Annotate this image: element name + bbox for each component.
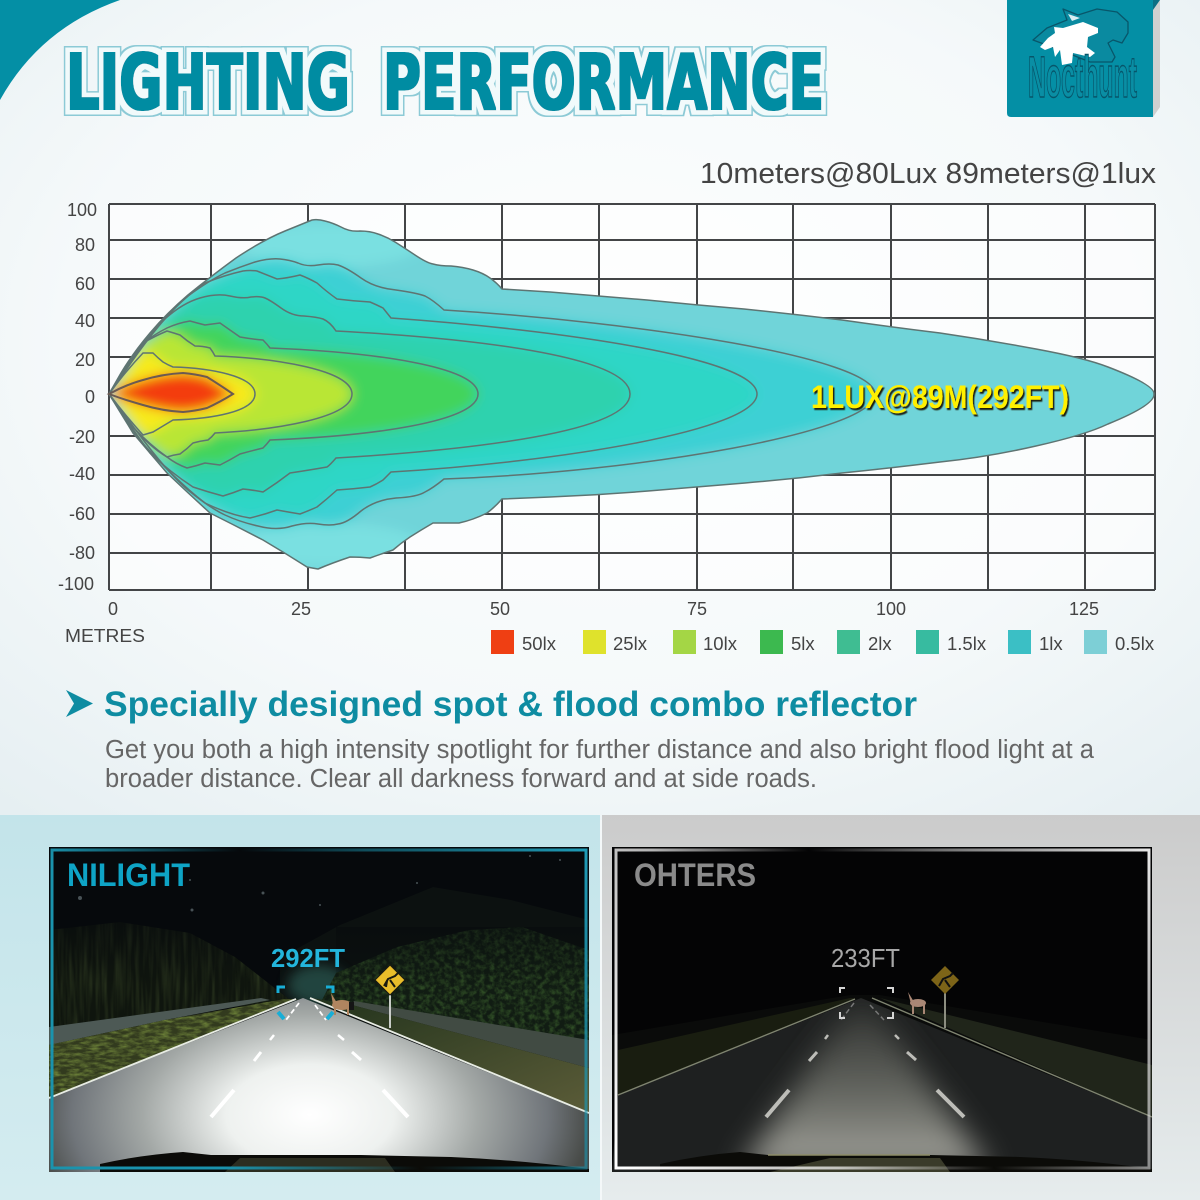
chart: beam pattern isolux diagram — [58, 200, 1170, 646]
focus brackets — [278, 987, 333, 993]
hood of vehicle — [100, 1152, 589, 1172]
frame — [52, 850, 586, 1168]
x axis labels: 0 — [108, 599, 118, 619]
corner accent — [0, 0, 120, 100]
panel: Others road scene — [612, 847, 1152, 1172]
x axis labels: 75 — [687, 599, 707, 619]
legend: 0.5lx — [1115, 633, 1155, 654]
frame — [616, 850, 1149, 1168]
beam gradient fill — [112, 220, 1154, 568]
grass verges — [49, 999, 298, 1098]
legend: 1.5lx — [947, 633, 987, 654]
lane dashes — [766, 1003, 964, 1117]
panel: Others background — [602, 815, 1200, 1200]
panel: Nilight background — [0, 815, 600, 1200]
y axis labels: 0 — [85, 387, 95, 407]
road surface — [49, 998, 589, 1172]
logo: Nocthunt badge — [1007, 0, 1160, 117]
y axis labels: 40 — [75, 311, 95, 331]
y axis labels: -60 — [69, 504, 95, 524]
icon: deer crossing sign — [375, 965, 405, 1028]
label NILIGHT: NILIGHT — [67, 857, 190, 893]
y axis labels — [58, 200, 97, 594]
grass verges — [618, 998, 855, 1095]
y axis labels: -20 — [69, 427, 95, 447]
feature description: broader distance. Clear all darkness forward and at side roads. — [105, 765, 817, 793]
feature description: Get you both a high intensity spotlight for further distance and also bright flood light at a — [105, 736, 1095, 764]
title — [66, 39, 824, 128]
guard rails — [49, 998, 270, 1045]
y axis labels: 100 — [67, 200, 97, 220]
legend — [491, 630, 1155, 654]
legend: 2lx — [868, 633, 892, 654]
stars — [78, 855, 561, 912]
title: PERFORMANCE — [383, 39, 824, 128]
feature description — [105, 736, 1095, 793]
distance 233FT: 233FT — [831, 943, 900, 973]
icon: deer — [908, 992, 926, 1014]
distance 292FT: 292FT — [271, 943, 345, 973]
legend: 50lx — [522, 633, 557, 654]
panel: Nilight road scene — [49, 847, 589, 1172]
x axis labels: 100 — [876, 599, 906, 619]
x axis title: METRES — [65, 626, 145, 646]
label OHTERS: OHTERS — [634, 857, 756, 893]
feature heading: Specially designed spot & flood combo reflector — [104, 685, 917, 724]
icon: deer crossing sign — [931, 966, 959, 1028]
y axis labels: 60 — [75, 274, 95, 294]
x axis labels: 25 — [291, 599, 311, 619]
road surface — [612, 998, 1152, 1172]
isolux contour lines — [109, 220, 1154, 569]
legend: 10lx — [703, 633, 738, 654]
x axis labels: 50 — [490, 599, 510, 619]
lane dashes — [211, 1003, 408, 1117]
page background — [0, 0, 1200, 820]
beam callout: 1LUX@89M(292FT) — [811, 379, 1069, 415]
legend: 5lx — [791, 633, 815, 654]
y axis labels: -40 — [69, 464, 95, 484]
icon: chevron arrow — [66, 690, 93, 717]
y axis labels: -80 — [69, 543, 95, 563]
icon: deer — [331, 993, 354, 1015]
spec line: 10meters@80Lux 89meters@1lux — [700, 158, 1157, 190]
title: LIGHTING — [66, 39, 350, 128]
legend: 25lx — [613, 633, 648, 654]
x axis labels: 125 — [1069, 599, 1099, 619]
y axis labels: 80 — [75, 235, 95, 255]
y axis labels: -100 — [58, 574, 94, 594]
focus brackets — [840, 988, 893, 1018]
y axis labels: 20 — [75, 350, 95, 370]
x axis labels — [108, 599, 1099, 619]
hood of vehicle — [660, 1152, 1152, 1172]
legend: 1lx — [1039, 633, 1063, 654]
